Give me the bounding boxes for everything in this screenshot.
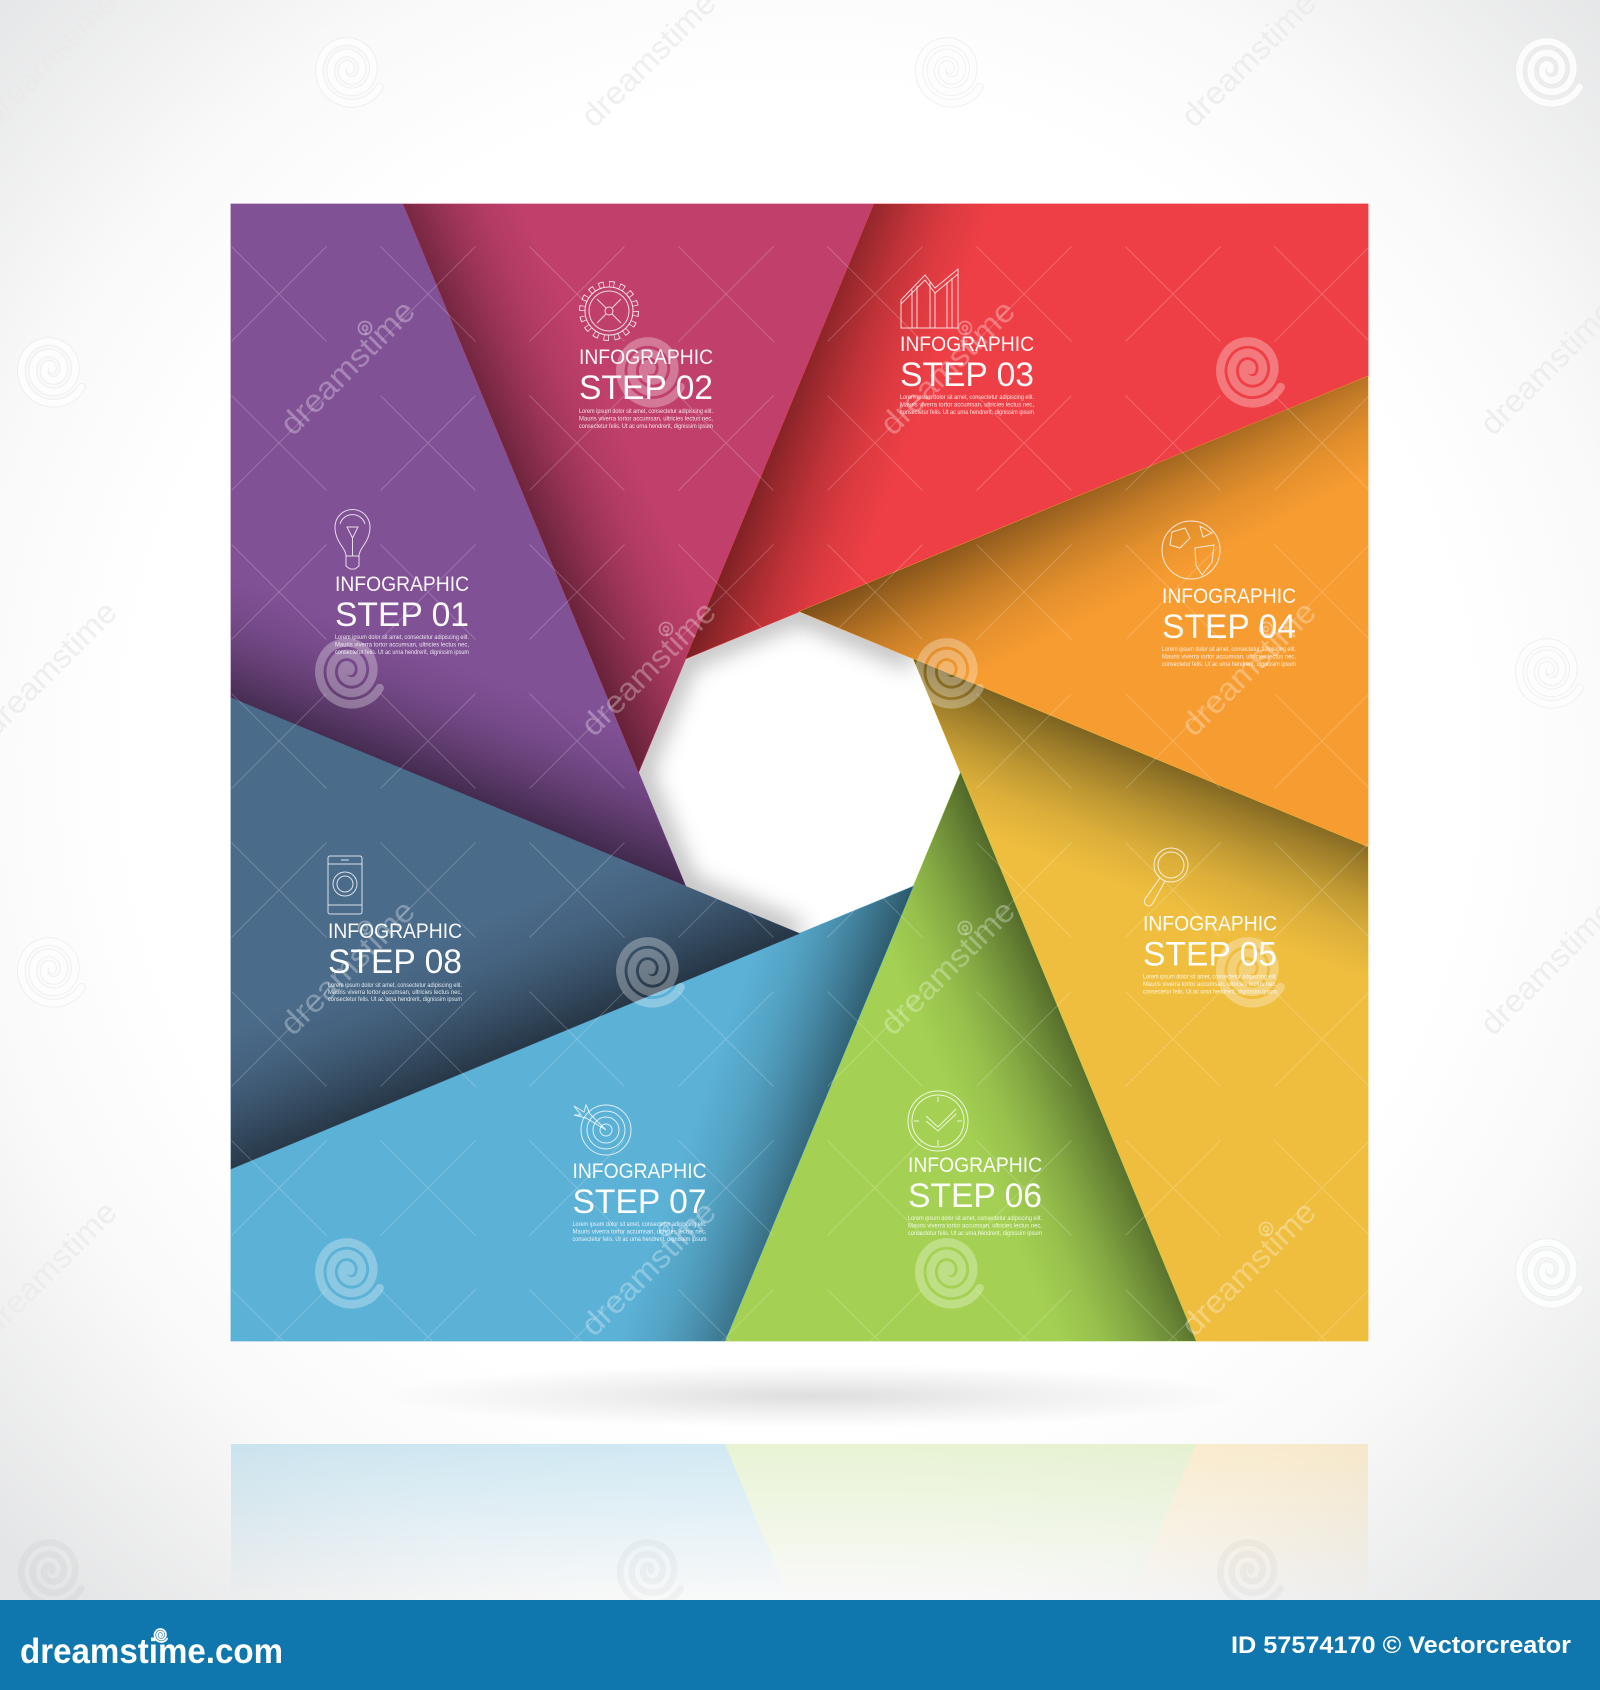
text: step 05: STEP 05: [1143, 936, 1277, 974]
text: step 08: [328, 920, 462, 1003]
text: step 02: [579, 346, 713, 430]
text: step 04: [1162, 585, 1296, 668]
watermarks on background: [0, 0, 1600, 1343]
text: step 02: Mauris viverra tortor accumsan, ultricies lectus nec,: [579, 416, 713, 422]
text: step 07: consectetur felis. Ut ac urna hendrerit, dignissim ipsum: [572, 1237, 706, 1243]
icon: bar chart: [901, 269, 958, 328]
text: step 04: consectetur felis. Ut ac urna hendrerit, dignissim ipsum: [1162, 662, 1296, 668]
text: step 03: STEP 03: [900, 356, 1034, 394]
text: step 01: Lorem ipsum dolor sit amet, consectetur adipiscing elit.: [335, 635, 469, 641]
text: step 06: Mauris viverra tortor accumsan, ultricies lectus nec,: [908, 1224, 1042, 1230]
watermarks over the square: dreamstime: [574, 1194, 723, 1343]
text: step 08: Lorem ipsum dolor sit amet, consectetur adipiscing elit.: [328, 983, 462, 989]
text: step 07: STEP 07: [572, 1183, 706, 1221]
panel: purple blade: [231, 204, 686, 886]
text: step 05: Mauris viverra tortor accumsan, ultricies lectus nec,: [1143, 982, 1277, 988]
text: step 06: Lorem ipsum dolor sit amet, consectetur adipiscing elit.: [908, 1216, 1042, 1222]
text: step 07: [572, 1160, 707, 1243]
text: step 06: [908, 1154, 1042, 1237]
text: step 06: INFOGRAPHIC: [908, 1154, 1042, 1177]
text: step 03: Lorem ipsum dolor sit amet, consectetur adipiscing elit.: [900, 395, 1034, 401]
icon: magnifier: [1144, 848, 1188, 906]
text: step 03: [900, 333, 1034, 416]
text: step 05: consectetur felis. Ut ac urna hendrerit, dignissim ipsum: [1143, 990, 1277, 996]
text: step 04: Mauris viverra tortor accumsan, ultricies lectus nec,: [1162, 654, 1296, 660]
footer credit: ID 57574170 © Vectorcreator: [1231, 1632, 1571, 1659]
text: step 02: INFOGRAPHIC: [579, 346, 713, 369]
text: step 07: INFOGRAPHIC: [572, 1160, 706, 1183]
text: step 08: STEP 08: [328, 943, 462, 981]
text: step 07: Lorem ipsum dolor sit amet, consectetur adipiscing elit.: [572, 1222, 707, 1228]
footer logo: dreamstime.com: [20, 1632, 283, 1671]
watermarks over the square: dreamstime: [873, 893, 1022, 1042]
centre hole with inner shadow: [639, 612, 916, 933]
panel: blue blade: [231, 886, 913, 1341]
icon: light bulb: [335, 510, 370, 569]
text: step 03: consectetur felis. Ut ac urna hendrerit, dignissim ipsum: [900, 410, 1034, 416]
ground shadow under square: [380, 1364, 1240, 1428]
panel: crimson blade: [403, 204, 874, 772]
text: step 06: STEP 06: [908, 1177, 1042, 1215]
text: step 01: Mauris viverra tortor accumsan, ultricies lectus nec,: [335, 642, 469, 648]
text: step 01: [335, 573, 469, 656]
text: step 02: STEP 02: [579, 369, 713, 407]
panel: yellow blade: [913, 659, 1368, 1341]
text: step 08: Mauris viverra tortor accumsan, ultricies lectus nec,: [328, 990, 462, 996]
text: step 02: Lorem ipsum dolor sit amet, consectetur adipiscing elit.: [579, 409, 713, 415]
panel: red blade: [686, 204, 1368, 659]
text: step 01: STEP 01: [335, 596, 469, 634]
text: step 04: INFOGRAPHIC: [1162, 585, 1296, 608]
watermarks over the square: dreamstime: [1174, 594, 1323, 743]
panel: orange blade: [800, 376, 1368, 847]
watermarks over the square: [273, 293, 1323, 1343]
watermark crosses over the square: [231, 204, 1368, 1341]
text: step 05: Lorem ipsum dolor sit amet, consectetur adipiscing elit.: [1143, 974, 1277, 980]
icon: smartphone: [328, 856, 362, 914]
panel: navy blade: [231, 698, 800, 1169]
text: step 08: INFOGRAPHIC: [328, 920, 462, 943]
text: step 02: consectetur felis. Ut ac urna hendrerit, dignissim ipsum: [579, 424, 713, 430]
watermarks over the square: dreamstime: [273, 893, 422, 1042]
watermarks over the square: dreamstime: [873, 293, 1022, 442]
icon: gear: [582, 284, 636, 338]
icon: clock: [908, 1091, 968, 1151]
text: step 08: consectetur felis. Ut ac urna hendrerit, dignissim ipsum: [328, 997, 462, 1003]
text: step 01: INFOGRAPHIC: [335, 573, 469, 596]
watermarks over the square: dreamstime: [1174, 1194, 1323, 1343]
watermarks over the square: dreamstime: [273, 293, 422, 442]
reflection of the square: [10, 1444, 1368, 1616]
text: step 06: consectetur felis. Ut ac urna hendrerit, dignissim ipsum: [908, 1231, 1042, 1237]
text: step 04: Lorem ipsum dolor sit amet, consectetur adipiscing elit.: [1162, 647, 1296, 653]
text: step 07: Mauris viverra tortor accumsan, ultricies lectus nec,: [572, 1230, 707, 1236]
panel: green blade: [725, 772, 1196, 1341]
text: step 01: consectetur felis. Ut ac urna hendrerit, dignissim ipsum: [335, 650, 469, 656]
text: step 03: INFOGRAPHIC: [900, 333, 1034, 356]
footer bar: [0, 1600, 1600, 1690]
icon: globe: [1162, 521, 1220, 579]
text: step 03: Mauris viverra tortor accumsan, ultricies lectus nec,: [900, 402, 1034, 408]
text: step 05: INFOGRAPHIC: [1143, 912, 1277, 936]
watermarks over the square: dreamstime: [574, 594, 723, 743]
text: step 05: [1143, 912, 1277, 996]
text: step 04: STEP 04: [1162, 608, 1296, 646]
icon: target: [574, 1105, 631, 1155]
